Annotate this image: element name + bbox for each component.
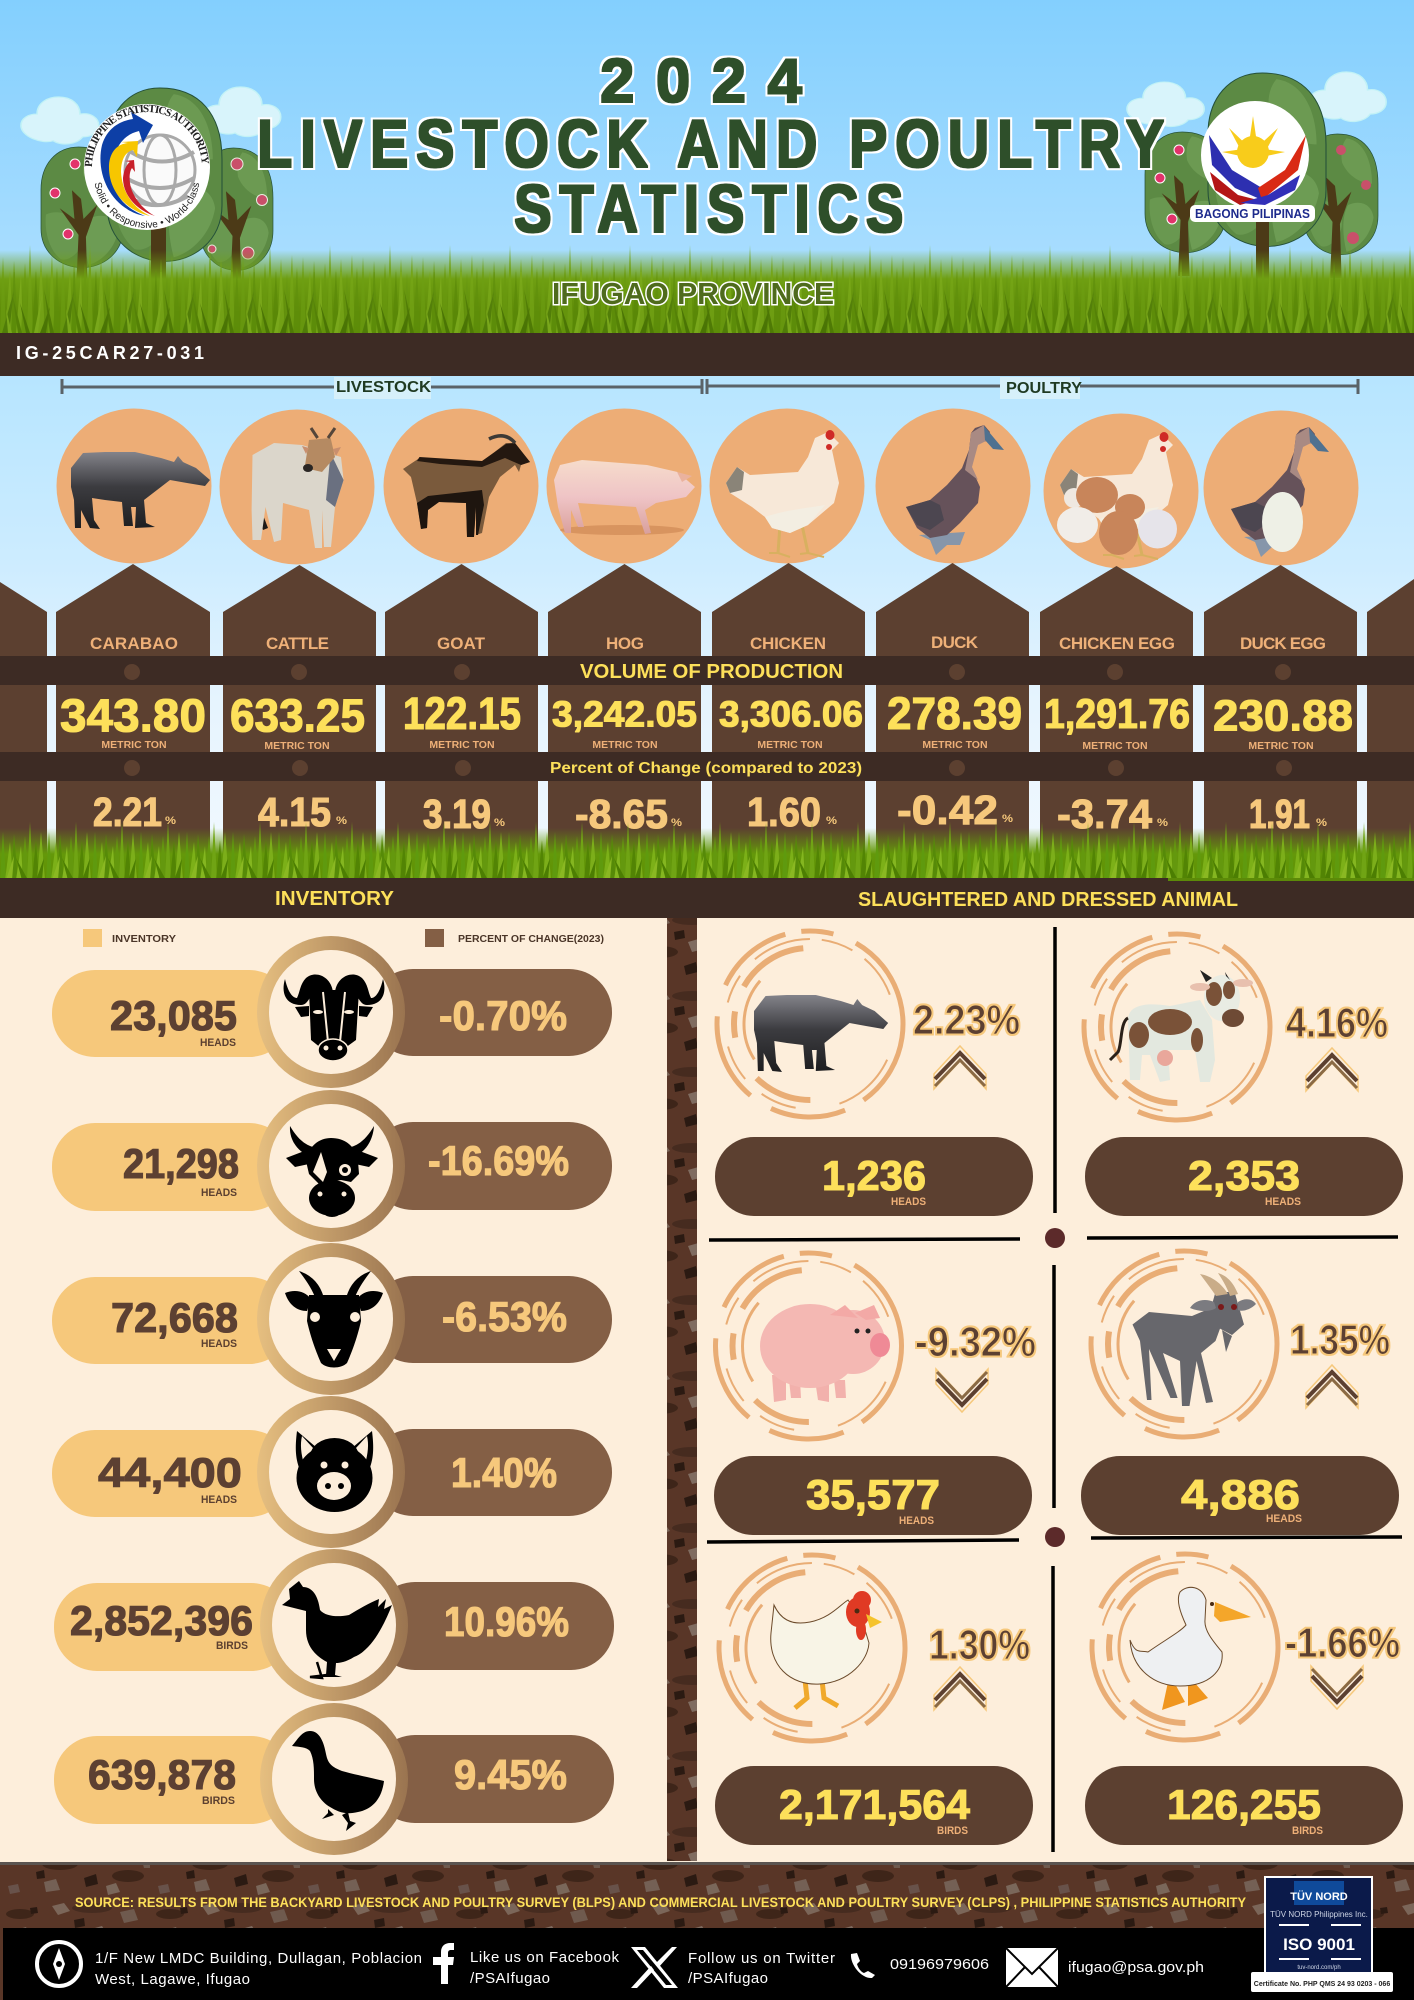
cell: cattle slaughtered: 4.16% xyxy=(1286,999,1388,1046)
cell: goat slaughtered: 4,886 xyxy=(1181,1471,1300,1518)
cell: goat slaughtered: HEADS xyxy=(1266,1513,1302,1525)
facebook text xyxy=(470,1949,620,1987)
volume of production values: 122.15 xyxy=(403,688,521,739)
row: hog inventory: HEADS xyxy=(201,1494,237,1506)
panel: inventory xyxy=(0,918,667,1863)
volume of production values: 3,242.05 xyxy=(552,694,697,734)
twitter text: Follow us on Twitter xyxy=(688,1950,835,1967)
source note: SOURCE: RESULTS FROM THE BACKYARD LIVESTOCK AND POULTRY SURVEY (BLPS) AND COMMERCIAL LIVESTOCK AND POULTRY SURVEY (CLPS) , PHILIPPINE STATISTICS AUTHORITY xyxy=(75,1894,1247,1910)
subtitle: province: IFUGAO PROVINCE xyxy=(552,276,834,311)
picket labels: HOG xyxy=(606,634,644,653)
photo circle: chicken xyxy=(710,408,864,564)
percent of change values: 1.91 xyxy=(1249,791,1310,837)
email: ifugao@psa.gov.ph xyxy=(1068,1959,1204,1976)
percent of change values: % xyxy=(165,815,176,827)
percent of change values: % xyxy=(826,815,837,827)
row: chicken inventory: 10.96% xyxy=(444,1598,569,1645)
rail: volume of production: VOLUME OF PRODUCTION xyxy=(580,661,843,683)
percent of change values: % xyxy=(336,815,347,827)
address: West, Lagawe, Ifugao xyxy=(95,1971,250,1988)
ISO certification badge: tuv-nord.com/ph xyxy=(1297,1965,1341,1971)
section header band: SLAUGHTERED AND DRESSED ANIMAL xyxy=(858,889,1238,911)
volume of production values: 278.39 xyxy=(887,688,1022,739)
icon: Bagong Pilipinas logo: BAGONG PILIPINAS xyxy=(1195,206,1310,221)
row: goat inventory: 72,668 xyxy=(111,1294,238,1341)
bracket: poultry: POULTRY xyxy=(1006,380,1082,397)
cell: cattle slaughtered: HEADS xyxy=(1265,1196,1301,1208)
photo circle: carabao xyxy=(56,408,212,564)
picket labels: CARABAO xyxy=(90,634,178,653)
percent of change values: % xyxy=(494,817,505,829)
volume of production values: 1,291.76 xyxy=(1044,690,1190,737)
icon: compass xyxy=(37,1942,81,1986)
metric ton units: METRIC TON xyxy=(101,739,167,751)
picket labels xyxy=(90,633,1326,653)
cell: duck slaughtered: 126,255 xyxy=(1167,1781,1321,1828)
cell: hog slaughtered: 35,577 xyxy=(806,1471,940,1518)
row: chicken inventory xyxy=(54,1549,614,1701)
picket labels: DUCK EGG xyxy=(1240,634,1326,653)
photo circle: chicken egg xyxy=(1044,414,1198,568)
photo circle: cattle xyxy=(220,410,374,564)
icon: phone xyxy=(851,1953,875,1978)
row: hog inventory: 44,400 xyxy=(98,1449,242,1496)
clouds xyxy=(21,72,1386,144)
legend: PERCENT OF CHANGE(2023) xyxy=(458,933,604,945)
metric ton units: METRIC TON xyxy=(429,739,495,751)
title: 2024 xyxy=(600,47,803,116)
footer contact bar xyxy=(3,1928,1414,2000)
row: goat inventory: -6.53% xyxy=(442,1293,567,1340)
address xyxy=(95,1950,422,1988)
legend xyxy=(83,929,604,947)
infographic ID band xyxy=(0,333,1414,376)
title xyxy=(257,47,1172,247)
picket labels: GOAT xyxy=(437,634,486,653)
photo circle: goat xyxy=(384,408,538,564)
icon: facebook xyxy=(433,1943,454,1984)
foreground grass xyxy=(0,822,1414,880)
trees right xyxy=(1145,73,1378,285)
cell: carabao slaughtered: 2.23% xyxy=(913,996,1020,1043)
rail: volume of production xyxy=(0,656,1414,685)
facebook text: Like us on Facebook xyxy=(470,1949,620,1966)
metric ton units: METRIC TON xyxy=(264,740,330,752)
section header band xyxy=(0,878,1414,918)
cell: carabao slaughtered: HEADS xyxy=(891,1196,926,1208)
percent of change values: 1.60 xyxy=(747,789,821,835)
picket labels: CHICKEN EGG xyxy=(1059,634,1175,653)
twitter text: /PSAIfugao xyxy=(688,1970,768,1987)
bracket: livestock xyxy=(62,377,702,399)
metric ton units xyxy=(101,739,1314,752)
icon: X xyxy=(631,1947,678,1988)
cell: chicken slaughtered: 1.30% xyxy=(929,1621,1030,1668)
infographic ID band: IG-25CAR27-031 xyxy=(16,343,204,363)
cell: goat slaughtered: 1.35% xyxy=(1290,1316,1390,1363)
section header band: INVENTORY xyxy=(275,888,395,910)
row: duck inventory: 9.45% xyxy=(454,1751,567,1798)
volume of production values: 230.88 xyxy=(1213,692,1353,740)
cell: hog slaughtered: -9.32% xyxy=(915,1318,1036,1365)
volume of production values xyxy=(60,688,1353,742)
ISO certification badge: TÜV NORD Philippines Inc. xyxy=(1270,1910,1368,1919)
row: chicken inventory: BIRDS xyxy=(216,1640,248,1652)
percent of change values: 2.21 xyxy=(93,789,162,835)
phone number: 09196979606 xyxy=(890,1956,989,1973)
twitter text xyxy=(688,1950,835,1987)
row: cattle inventory xyxy=(52,1090,612,1242)
percent of change values: -3.74 xyxy=(1057,791,1152,837)
picket labels: CATTLE xyxy=(266,634,329,653)
icon: PSA logo: Solid • Responsive • World-class xyxy=(95,182,199,228)
row: carabao inventory: HEADS xyxy=(200,1037,236,1049)
volume of production values: 343.80 xyxy=(60,690,206,742)
cell: goat slaughtered xyxy=(1057,1217,1399,1535)
percent of change values: % xyxy=(1316,817,1327,829)
photo circle: duck xyxy=(876,408,1030,564)
cell: duck slaughtered xyxy=(1058,1520,1403,1845)
legend: INVENTORY xyxy=(112,933,176,945)
icon: PSA logo xyxy=(84,104,210,230)
metric ton units: METRIC TON xyxy=(592,739,658,751)
row: duck inventory: BIRDS xyxy=(202,1795,235,1807)
row: carabao inventory: 23,085 xyxy=(110,992,237,1039)
photo circle: duck egg xyxy=(1204,410,1358,566)
picket labels: CHICKEN xyxy=(750,634,826,653)
volume of production values: 633.25 xyxy=(230,690,365,742)
rail: percent of change xyxy=(0,752,1414,781)
cell dividers xyxy=(707,927,1402,1852)
trees left xyxy=(27,88,273,313)
ISO certification badge: ISO 9001 xyxy=(1283,1935,1355,1954)
address: 1/F New LMDC Building, Dullagan, Poblacion xyxy=(95,1950,422,1967)
row: duck inventory xyxy=(54,1703,614,1855)
row: goat inventory xyxy=(52,1243,612,1395)
header grass xyxy=(0,243,1414,333)
percent of change values: -0.42 xyxy=(897,787,998,833)
row: cattle inventory: HEADS xyxy=(201,1187,237,1199)
percent of change values: -8.65 xyxy=(575,791,668,837)
row: chicken inventory: 2,852,396 xyxy=(70,1597,253,1644)
row: hog inventory xyxy=(52,1396,612,1548)
ISO certification badge: Certificate No. PHP QMS 24 93 0203 - 066 xyxy=(1254,1981,1390,1988)
percent of change values xyxy=(93,787,1327,837)
bracket: livestock: LIVESTOCK xyxy=(336,379,431,396)
metric ton units: METRIC TON xyxy=(757,739,823,751)
cell: chicken slaughtered xyxy=(685,1521,1033,1845)
cell: chicken slaughtered: 2,171,564 xyxy=(779,1781,971,1828)
bracket: poultry xyxy=(707,377,1358,399)
percent of change values: % xyxy=(1002,813,1013,825)
ISO certification badge: TÜV NORD xyxy=(1290,1890,1348,1903)
photo circle: hog xyxy=(546,408,702,564)
picket labels: DUCK xyxy=(931,633,979,652)
metric ton units: METRIC TON xyxy=(1082,740,1148,752)
row: hog inventory: 1.40% xyxy=(451,1449,557,1496)
percent of change values: % xyxy=(1157,817,1168,829)
soil footer band xyxy=(0,1862,1414,2000)
icon: PSA logo: PHILIPPINE STATISTICS AUTHORITY xyxy=(84,104,210,167)
metric ton units: METRIC TON xyxy=(1248,740,1314,752)
cell: carabao slaughtered xyxy=(683,897,1033,1216)
sky background xyxy=(0,0,1414,880)
cell: cattle slaughtered: 2,353 xyxy=(1188,1152,1300,1199)
facebook text: /PSAIfugao xyxy=(470,1970,550,1987)
cell: chicken slaughtered: BIRDS xyxy=(937,1825,968,1837)
cell: cattle slaughtered xyxy=(1050,900,1403,1216)
cell: hog slaughtered: HEADS xyxy=(899,1515,934,1527)
row: cattle inventory: -16.69% xyxy=(428,1137,569,1184)
row: duck inventory: 639,878 xyxy=(88,1751,236,1798)
percent of change values: % xyxy=(671,817,682,829)
cell: carabao slaughtered: 1,236 xyxy=(822,1152,926,1199)
title: STATISTICS xyxy=(514,171,911,247)
metric ton units: METRIC TON xyxy=(922,739,988,751)
row: goat inventory: HEADS xyxy=(201,1338,237,1350)
row: carabao inventory xyxy=(52,936,612,1088)
panel: slaughtered and dressed animal xyxy=(681,897,1414,1863)
percent of change values: 4.15 xyxy=(258,789,331,835)
fence pickets xyxy=(0,563,1414,880)
volume of production values: 3,306.06 xyxy=(719,694,863,734)
row: cattle inventory: 21,298 xyxy=(123,1140,239,1187)
ISO certification badge xyxy=(1251,1877,1393,1992)
row: carabao inventory: -0.70% xyxy=(439,992,567,1039)
rail: percent of change: Percent of Change (compared to 2023) xyxy=(550,760,862,777)
icon: Bagong Pilipinas logo xyxy=(1190,101,1315,222)
title: LIVESTOCK AND POULTRY xyxy=(257,106,1172,182)
cell: duck slaughtered: BIRDS xyxy=(1292,1825,1323,1837)
cell: hog slaughtered xyxy=(681,1219,1036,1535)
icon: envelope xyxy=(1006,1948,1058,1987)
soil divider xyxy=(667,918,697,1861)
percent of change values: 3.19 xyxy=(423,791,491,837)
